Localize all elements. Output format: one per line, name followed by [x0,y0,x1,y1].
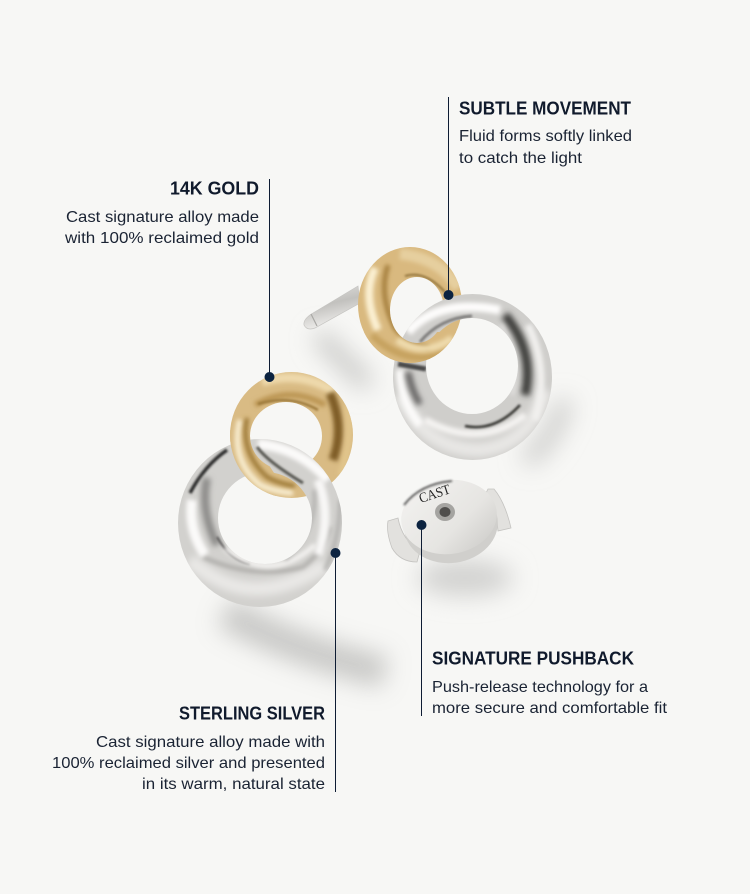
marker [264,372,274,382]
gold ring front overlap [230,430,276,496]
description: Fluid forms softly linked [459,128,632,145]
silver ring front [178,439,342,607]
silver ring rear [393,294,552,460]
marker [416,520,426,530]
gold ring front [225,365,360,505]
gold ring rear [350,240,470,370]
description [64,209,259,247]
description: Cast signature alloy made with [96,734,325,751]
shadows [225,335,565,672]
left wing [388,518,420,562]
callout: sterling silver [52,548,340,793]
top disk [396,474,502,560]
center hole [435,503,455,521]
description: more secure and comfortable fit [432,700,668,717]
description: Cast signature alloy made [66,209,259,226]
leader line [448,97,450,295]
description: in its warm, natural state [142,776,325,793]
heading: STERLING SILVER [179,704,325,724]
heading: SUBTLE MOVEMENT [459,98,631,118]
earring: back with gold and silver links [304,247,552,460]
description: with 100% reclaimed gold [64,230,259,247]
right wing [484,489,511,531]
pushback earring back [388,474,511,569]
description: to catch the light [459,150,583,167]
heading: 14K GOLD [170,178,259,198]
gold ring rear overlap [364,332,456,363]
marker [330,548,340,558]
description [432,679,668,717]
dark rim [404,481,452,505]
brand mark: CAST [417,482,453,507]
description [459,128,632,167]
stud post [304,286,360,329]
leader line [268,179,270,377]
description: 100% reclaimed silver and presented [52,755,325,772]
earring: front with gold and silver links [178,372,353,607]
description: Push-release technology for a [432,679,648,696]
marker [444,290,454,300]
leader line [420,525,422,716]
callout: 14K gold [64,178,274,382]
leader line [334,553,336,792]
description [52,734,325,793]
heading: SIGNATURE PUSHBACK [432,648,634,668]
callout: subtle movement [444,97,632,300]
callout: signature pushback [416,520,668,717]
base disk [399,481,503,569]
